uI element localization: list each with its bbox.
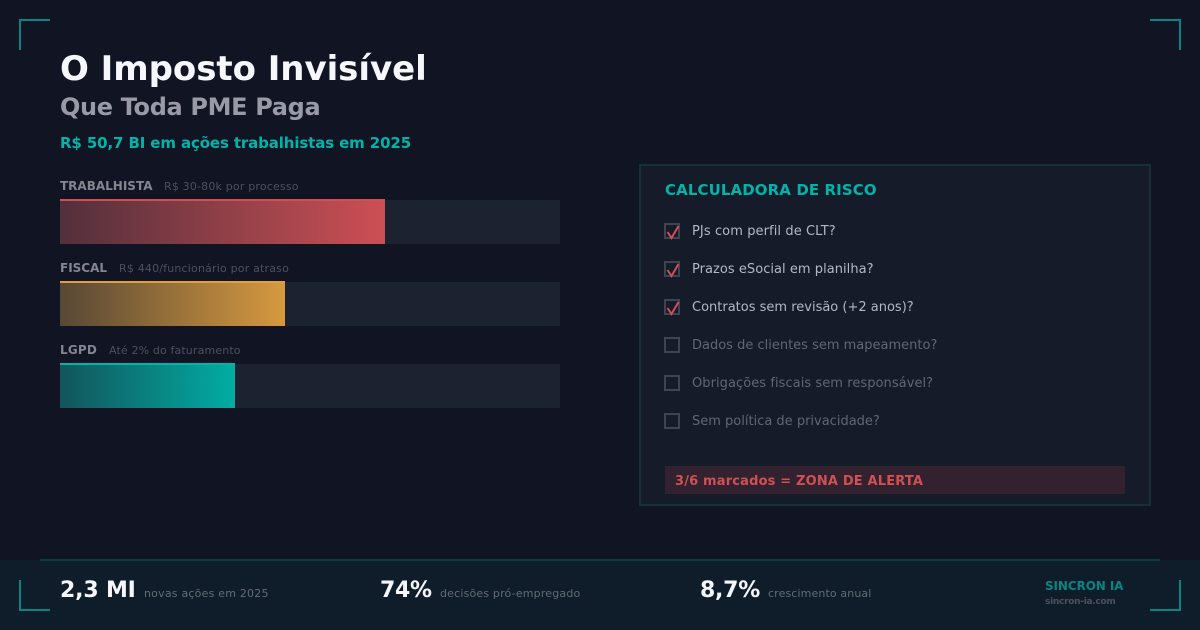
corner bracket: top right [1150,20,1180,50]
checkbox 3 [665,300,679,314]
checklist label 5: Obrigações fiscais sem responsável? [692,376,933,391]
headline figure: R$ 50,7 BI em ações trabalhistas em 2025 [60,134,411,152]
footer band [0,559,1200,630]
panel: risk calculator [640,165,1150,505]
track: fiscal [60,282,560,326]
alert banner [665,466,1125,494]
checklist label 2: Prazos eSocial em planilha? [692,262,874,277]
checklist label 4: Dados de clientes sem mapeamento? [692,338,937,353]
checklist label 3: Contratos sem revisão (+2 anos)? [692,300,914,315]
top edge: fiscal [60,281,285,283]
checklist label 1: PJs com perfil de CLT? [692,224,836,239]
title: O Imposto Invisível [60,49,427,89]
note: fiscal: R$ 440/funcionário por atraso [119,262,289,275]
corner bracket: bottom left [20,580,50,610]
label: fiscal: FISCAL [60,261,107,275]
checkbox 2 [665,262,679,276]
checkbox 5 [665,376,679,390]
note: lgpd: Até 2% do faturamento [109,344,241,357]
stat note: pro-employee decisions: decisões pró-empregado [440,587,580,600]
checkbox 6 [665,414,679,428]
corner bracket: top left [20,20,50,50]
stat value: new lawsuits: 2,3 MI [60,578,136,603]
panel heading: CALCULADORA DE RISCO [665,181,877,199]
stat value: pro-employee decisions: 74% [380,578,432,603]
checkbox 1 [665,224,679,238]
track: trabalhista [60,200,560,244]
label: lgpd: LGPD [60,343,97,357]
stat note: new lawsuits: novas ações em 2025 [144,587,269,600]
label: trabalhista: TRABALHISTA [60,179,152,193]
checklist label 6: Sem política de privacidade? [692,414,880,429]
subtitle: Que Toda PME Paga [60,93,320,121]
checkbox 4 [665,338,679,352]
fill: fiscal [60,282,285,326]
top edge: trabalhista [60,199,385,201]
top edge: lgpd [60,363,235,365]
fill: lgpd [60,364,235,408]
fill: trabalhista [60,200,385,244]
brand name: SINCRON IA [1045,579,1123,593]
corner bracket: bottom right [1150,580,1180,610]
track: lgpd [60,364,560,408]
note: trabalhista: R$ 30-80k por processo [164,180,299,193]
alert text: 3/6 marcados = ZONA DE ALERTA [675,474,923,489]
brand url: sincron-ia.com [1045,597,1116,607]
stat value: annual growth: 8,7% [700,578,760,603]
stat note: annual growth: crescimento anual [768,587,871,600]
